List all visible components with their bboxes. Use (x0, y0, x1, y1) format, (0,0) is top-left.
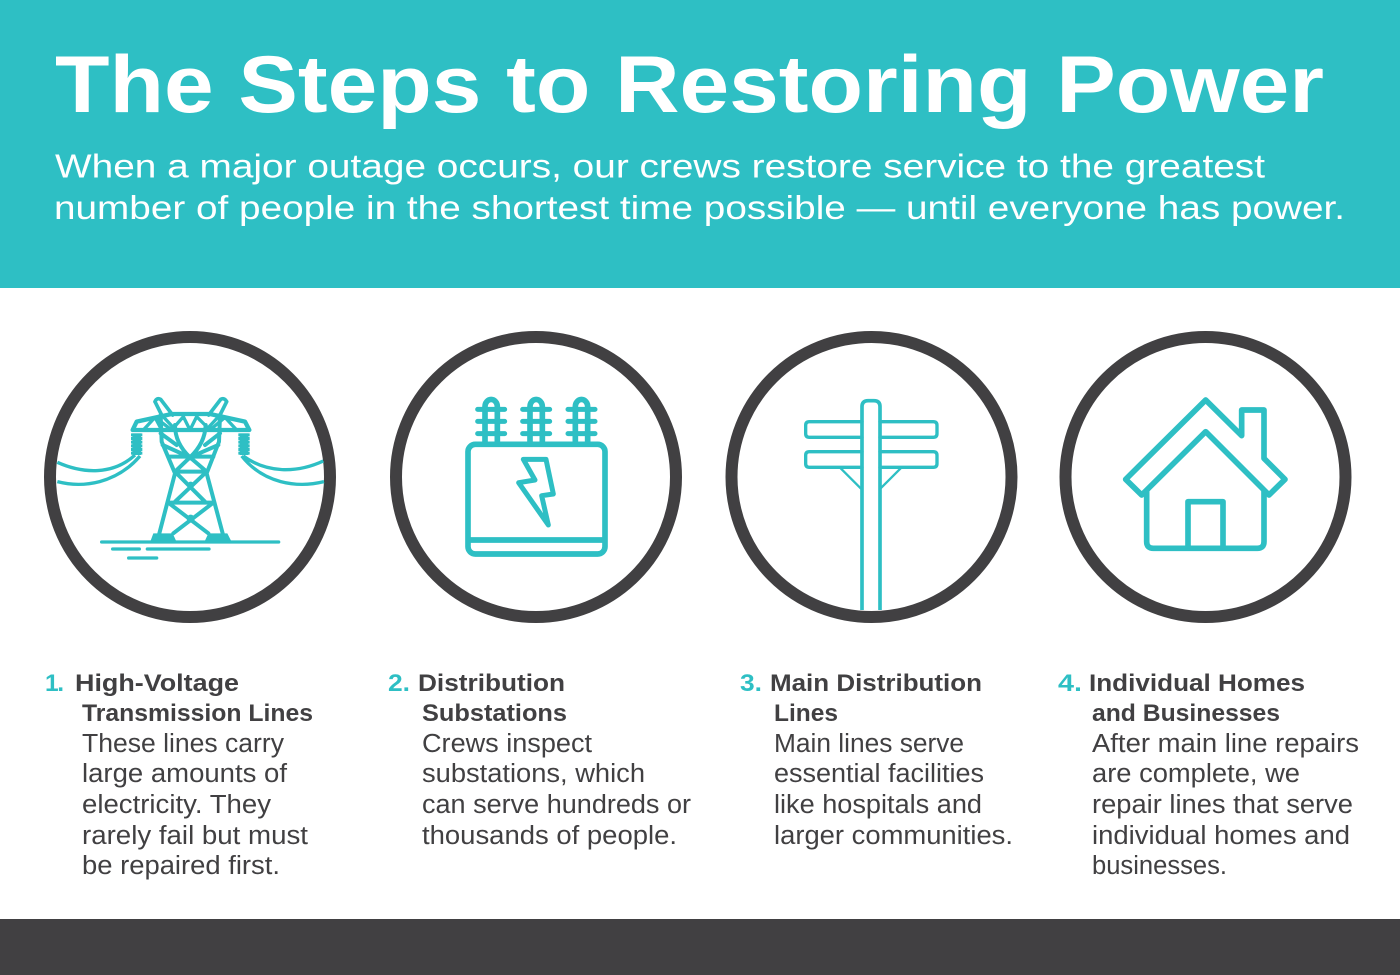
transformer box (468, 444, 605, 554)
step 4 text: are complete, we (1092, 760, 1300, 788)
step 1 text: Transmission Lines (82, 700, 313, 727)
step 3 text: like hospitals and (774, 791, 982, 819)
step 2 text: Crews inspect (422, 730, 592, 758)
step 1 text: 1. (45, 670, 64, 697)
bushings (485, 399, 588, 443)
tower joints (151, 454, 231, 541)
pole (862, 401, 880, 610)
step 2 icon: substation transformer in circle (396, 337, 676, 617)
step 2 text: substations, which (422, 760, 645, 788)
braces (841, 468, 901, 488)
step 3 text: larger communities. (774, 822, 1013, 850)
footer band (0, 919, 1400, 975)
step 1 text: High-Voltage (75, 670, 239, 697)
step 3 text: essential facilities (774, 760, 984, 788)
walls (1147, 492, 1264, 548)
lightning bolt (519, 459, 553, 525)
roof and chimney (1126, 400, 1285, 495)
step 4 icon: house in circle (1066, 337, 1346, 617)
subtitle (54, 148, 1345, 227)
step 4 text: repair lines that serve (1092, 791, 1353, 819)
step 2 text: can serve hundreds or (422, 791, 692, 819)
step 2 text: 2. (388, 670, 410, 697)
step 1 text (45, 670, 313, 880)
wires (57, 455, 324, 484)
header band (0, 0, 1400, 288)
step 1 text: These lines carry (82, 730, 284, 758)
step 3 text: Main lines serve (774, 730, 964, 758)
subtitle: number of people in the shortest time possible — until everyone has power. (54, 190, 1345, 227)
step 3 text: 3. (740, 670, 762, 697)
step 1 text: electricity. They (82, 791, 271, 819)
step 4 text: After main line repairs (1092, 730, 1359, 758)
step 4 text: 4. (1058, 670, 1082, 697)
step 2 text: thousands of people. (422, 822, 677, 850)
step 3 icon: utility pole in circle (732, 337, 1012, 617)
step 4 text (1058, 670, 1359, 880)
step 4 text: businesses. (1092, 852, 1227, 880)
step 2 text (388, 670, 692, 850)
step 4 text: individual homes and (1092, 822, 1350, 850)
door (1188, 502, 1223, 548)
step 1 text: be repaired first. (82, 852, 280, 880)
title: The Steps to Restoring Power (55, 40, 1324, 130)
subtitle: When a major outage occurs, our crews restore service to the greatest (55, 148, 1266, 186)
horns and crossarm (155, 399, 227, 415)
step 1 icon: transmission tower in circle (50, 337, 330, 617)
crossarms (806, 422, 937, 467)
insulators (137, 433, 244, 455)
step 1 text: large amounts of (82, 760, 288, 788)
tower body (159, 415, 223, 533)
ground lines (102, 542, 279, 558)
step 2 text: Substations (422, 700, 567, 727)
step 1 text: rarely fail but must (82, 822, 308, 850)
step 3 text: Main Distribution (770, 670, 982, 697)
step 4 text: Individual Homes (1089, 670, 1305, 697)
step 3 text (740, 670, 1013, 850)
step 4 text: and Businesses (1092, 700, 1280, 727)
step 3 text: Lines (774, 700, 838, 727)
step 2 text: Distribution (418, 670, 565, 697)
